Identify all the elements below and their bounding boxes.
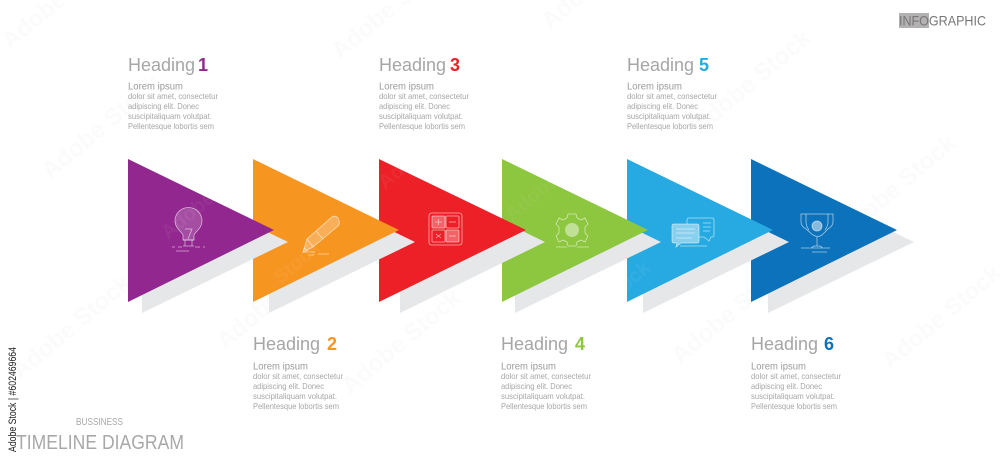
arrow 3: red triangle with shadow xyxy=(379,159,545,313)
background watermark: Adobe Stock xyxy=(337,284,467,400)
step 2 text block: suscipitaliquam volutpat. xyxy=(253,391,337,401)
step 3 text block: adipiscing elit. Donec xyxy=(379,101,450,111)
icon: light bulb xyxy=(172,208,205,251)
heading 4: 4 xyxy=(575,334,585,354)
step 1 text block: suscipitaliquam volutpat. xyxy=(128,111,212,121)
step 6 text block: dolor sit amet, consectetur xyxy=(751,371,841,381)
step 3 text block xyxy=(379,55,469,131)
step 3 text block: dolor sit amet, consectetur xyxy=(379,91,469,101)
step 4 text block: suscipitaliquam volutpat. xyxy=(501,391,585,401)
arrow 5: light blue triangle with shadow xyxy=(627,159,789,313)
icon: pencil xyxy=(303,216,339,255)
step 2 text block: Pellentesque lobortis sem xyxy=(253,401,339,411)
step 5 text block: Lorem ipsum xyxy=(627,82,682,92)
step 3 text block: suscipitaliquam volutpat. xyxy=(379,111,463,121)
heading 5: 5 xyxy=(699,55,709,75)
step 5 text block xyxy=(627,55,717,131)
step 6 text block xyxy=(751,334,841,411)
step 5 text block: dolor sit amet, consectetur xyxy=(627,91,717,101)
triangle watermark: Adobe xyxy=(157,187,219,244)
heading 1: 1 xyxy=(198,55,208,75)
infographic label: INFOGRAPHIC xyxy=(899,12,986,28)
heading 3: 3 xyxy=(450,55,460,75)
arrow 1: purple triangle with shadow xyxy=(128,159,288,313)
step 1 text block: dolor sit amet, consectetur xyxy=(128,91,218,101)
triangle watermark: Stock xyxy=(599,256,656,309)
step 3 text block: Pellentesque lobortis sem xyxy=(379,121,465,131)
background watermark: Adobe Stock xyxy=(832,129,962,245)
icon: gear xyxy=(556,214,589,247)
step 1 text block: adipiscing elit. Donec xyxy=(128,101,199,111)
icon: chat bubbles xyxy=(672,218,714,247)
arrow 2: orange triangle with shadow xyxy=(253,159,415,313)
step 2 text block: Lorem ipsum xyxy=(253,362,308,372)
step 1 text block: Lorem ipsum xyxy=(128,82,183,92)
step 6 text block: suscipitaliquam volutpat. xyxy=(751,391,835,401)
heading 4: Heading xyxy=(501,334,573,354)
background watermark: Adobe Stock xyxy=(212,239,342,355)
title: timeline diagram: TIMELINE DIAGRAM xyxy=(16,432,184,454)
step 1 text block: Pellentesque lobortis sem xyxy=(128,121,214,131)
heading 6: Heading xyxy=(751,334,823,354)
step 4 text block xyxy=(501,334,591,411)
step 3 text block: Lorem ipsum xyxy=(379,82,434,92)
background watermark: Adobe Stock xyxy=(667,254,797,370)
stock id vertical text: Adobe Stock | #602469664 xyxy=(7,347,19,452)
triangle watermark: Stock xyxy=(269,236,326,289)
icon: calculator xyxy=(429,213,462,245)
step 5 text block: suscipitaliquam volutpat. xyxy=(627,111,711,121)
heading 3: Heading xyxy=(379,55,451,75)
subtitle: bussiness: BUSSINESS xyxy=(76,416,123,428)
triangle watermark: Adobe xyxy=(501,169,563,226)
icon: trophy xyxy=(801,214,833,252)
step 2 text block: dolor sit amet, consectetur xyxy=(253,371,343,381)
step 4 text block: Pellentesque lobortis sem xyxy=(501,401,587,411)
triangle watermark xyxy=(157,137,656,309)
heading 5: Heading xyxy=(627,55,699,75)
step 4 text block: adipiscing elit. Donec xyxy=(501,381,572,391)
step 6 text block: Pellentesque lobortis sem xyxy=(751,401,837,411)
background watermark: Adobe Stock xyxy=(37,69,167,185)
background watermark: Adobe Stock xyxy=(7,269,137,385)
step 4 text block: dolor sit amet, consectetur xyxy=(501,371,591,381)
step 5 text block: Pellentesque lobortis sem xyxy=(627,121,713,131)
arrow 6: dark blue triangle with shadow xyxy=(751,159,914,313)
heading 2: 2 xyxy=(327,334,337,354)
triangle watermark: Adobe xyxy=(374,137,436,194)
step 4 text block: Lorem ipsum xyxy=(501,362,556,372)
arrow 4: green triangle with shadow xyxy=(502,159,661,313)
step 6 text block: adipiscing elit. Donec xyxy=(751,381,822,391)
step 2 text block xyxy=(253,334,343,411)
background watermark: Adobe Stock xyxy=(687,24,817,140)
step 6 text block: Lorem ipsum xyxy=(751,362,806,372)
step 1 text block xyxy=(128,55,218,131)
step 2 text block: adipiscing elit. Donec xyxy=(253,381,324,391)
heading 6: 6 xyxy=(824,334,834,354)
heading 2: Heading xyxy=(253,334,325,354)
step 5 text block: adipiscing elit. Donec xyxy=(627,101,698,111)
heading 1: Heading xyxy=(128,55,200,75)
